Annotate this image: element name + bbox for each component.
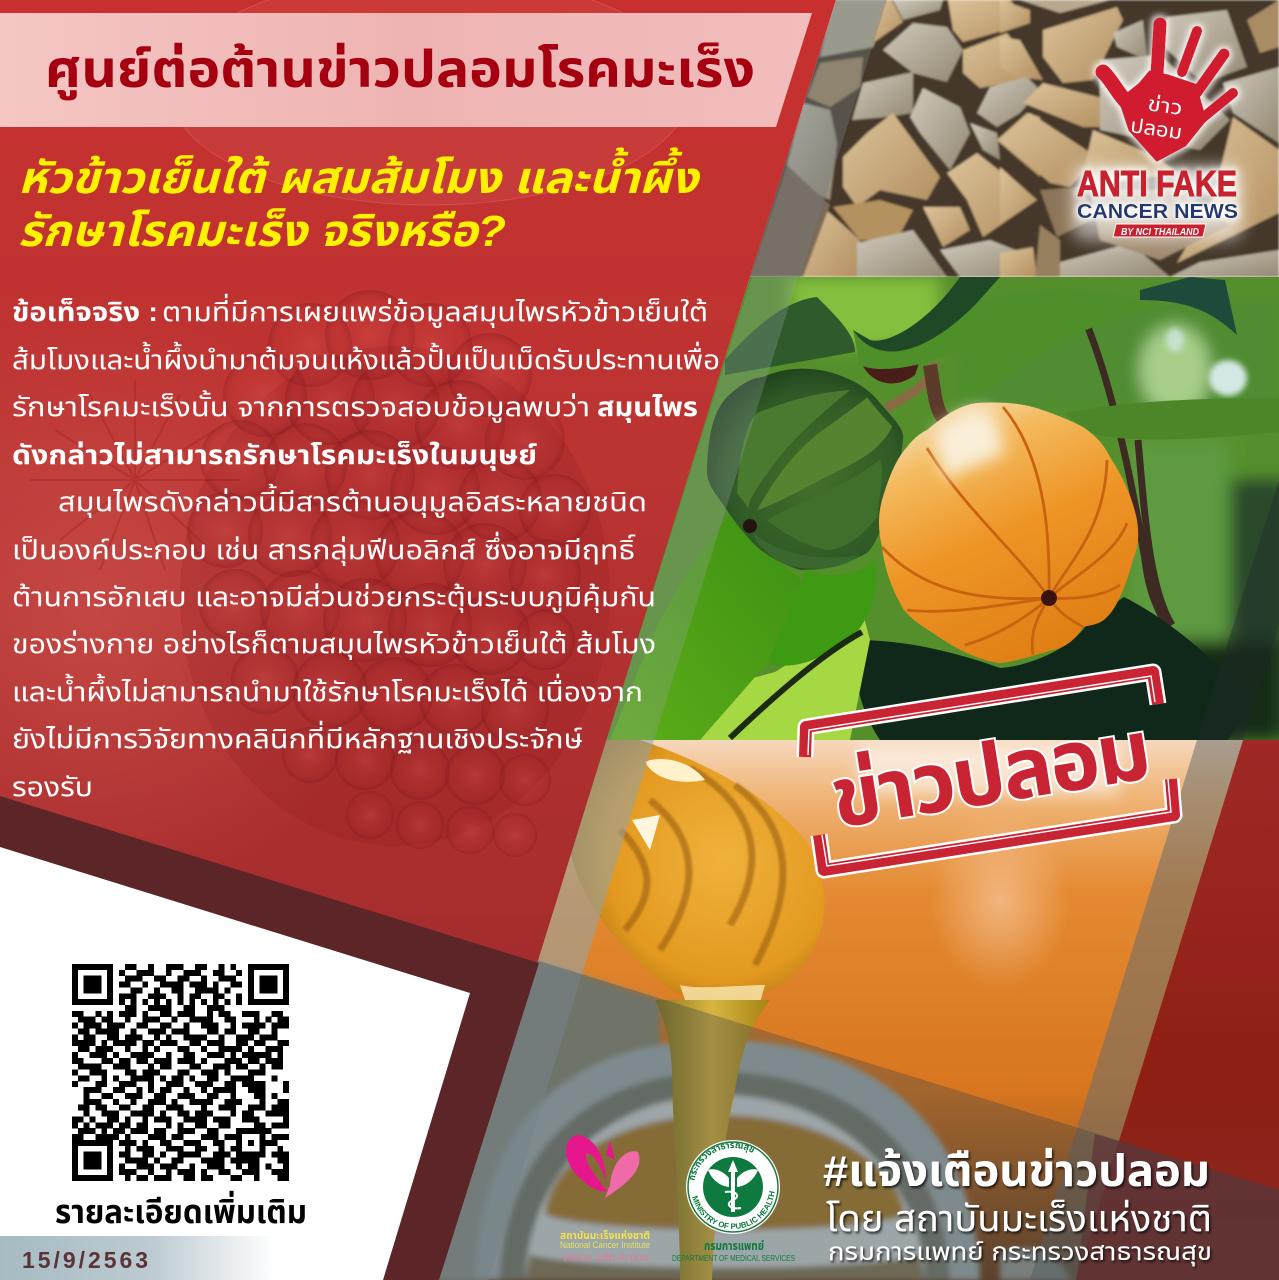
text: fake news in palm: ปลอม (1129, 115, 1184, 144)
body text: รักษาโรคมะเร็งนั้น จากการตรวจสอบข้อมูลพบว่า (12, 390, 590, 423)
body text (12, 293, 720, 802)
body text: ตามที่มีการเผยแพร่ข้อมูลสมุนไพรหัวข้าวเย็นใต้ (162, 293, 708, 328)
footer text: hashtag and organisation: #แจ้งเตือนข่าวปลอม (823, 1147, 1210, 1196)
logo: ministry of public health (672, 1140, 795, 1263)
logo: ministry of public health: DEPARTMENT OF MEDICAL SERVICES (672, 1254, 795, 1263)
stem: lower branch (730, 632, 862, 738)
body text: สมุนไพร (597, 392, 698, 423)
leaf: top dark (725, 297, 855, 375)
body text: และน้ำผึ้งไม่สามารถนำมาใช้รักษาโรคมะเร็งได้ เนื่องจาก (12, 673, 643, 707)
overlay: right band on fruit (1226, 480, 1279, 740)
panel: red background (0, 0, 836, 1280)
footer text: hashtag and organisation (823, 1147, 1212, 1267)
subheading question: รักษาโรคมะเร็ง จริงหรือ? (18, 207, 506, 256)
panel: white QR area (0, 847, 470, 1280)
body text: ยังไม่มีการวิจัยทางคลินิกที่มีหลักฐานเชิงประจักษ์ (12, 720, 583, 754)
title: ศูนย์ต่อต้านข่าวปลอมโรคมะเร็ง (45, 41, 755, 101)
overlay: bottom right maroon (1076, 1134, 1279, 1280)
leaf: lower dark (855, 597, 1250, 740)
logo: national cancer institute (560, 1135, 650, 1264)
honey dipper (571, 740, 824, 1020)
overlay: bottom dark wash (439, 960, 1279, 1280)
green fruit (707, 369, 903, 570)
text: fake news in palm (1129, 90, 1187, 144)
date band: 15/9/2563 (22, 1247, 148, 1273)
body text: ส้มโมงและน้ำผึ้งนำมาต้มจนแห้งแล้วปั้นเป็นเม็ดรับประทานเพื่อ (12, 341, 720, 375)
logo: national cancer institute: Vision with Action (562, 1252, 648, 1264)
logo: ministry of public health: กระทรวงสาธารณสุข (690, 1142, 754, 1180)
branch (1085, 320, 1172, 625)
overlay: right band on honey (1030, 740, 1243, 1280)
blurred foliage (790, 277, 1279, 740)
icon: caduceus (708, 1160, 758, 1212)
leaf: bottom left big (610, 512, 801, 740)
body text: ของร่างกาย อย่างไรก็ตามสมุนไพรหัวข้าวเย็นใต้ ส้มโมง (12, 629, 656, 660)
badge: by nci thailand: BY NCI THAILAND (1121, 227, 1199, 238)
body text: สมุนไพรดังกล่าวนี้มีสารต้านอนุมูลอิสระหลายชนิด (58, 483, 647, 518)
leaf: bottom lime gap (700, 610, 870, 740)
overlay: translucent band on stones (750, 0, 887, 277)
body text: รองรับ (12, 772, 93, 802)
photo: honey dipper and jar (439, 740, 1279, 1280)
text: cancer news: CANCER NEWS (1077, 201, 1238, 223)
body text: ดังกล่าวไม่สามารถรักษาโรคมะเร็งในมนุษย์ (12, 440, 537, 471)
panel: dark maroon corner (0, 796, 539, 1280)
icon: pink wings (566, 1135, 639, 1198)
date band (0, 1236, 275, 1280)
overlay: right red panel (1097, 740, 1279, 1226)
illustration: spiky cell (30, 380, 240, 570)
logo: national cancer institute: สถาบันมะเร็งแห่งชาติ (560, 1229, 650, 1242)
stamp: fake news: ข่าวปลอม (825, 702, 1157, 845)
photo: garcinia fruit (600, 277, 1279, 740)
body text: ต้านการอักเสบ และอาจมีส่วนช่วยกระตุ้นระบบภูมิคุ้มกัน (12, 582, 656, 613)
body text: เป็นองค์ประกอบ เช่น สารกลุ่มฟีนอลิกส์ ซึ่งอาจมีฤทธิ์ (12, 531, 636, 566)
subheading question: หัวข้าวเย็นใต้ ผสมส้มโมง และน้ำผึ้ง (18, 147, 701, 203)
body text: ข้อเท็จจริง : (12, 297, 158, 327)
photo: stones (740, 0, 1279, 277)
QR caption: รายละเอียดเพิ่มเติม (55, 1190, 307, 1230)
jar (440, 958, 1070, 1280)
text: fake news in palm: ข่าว (1146, 92, 1184, 120)
QR code (72, 964, 289, 1181)
glow: behind logo text (1072, 165, 1242, 240)
footer text: hashtag and organisation: กรมการแพทย์ กระทรวงสาธารณสุข (828, 1238, 1212, 1267)
logo: ministry of public health: กรมการแพทย์ (704, 1239, 764, 1253)
orange fruit (879, 402, 1138, 663)
subheading question (18, 147, 701, 256)
logo: ministry of public health: MINISTRY OF PUBLIC HEALTH (692, 1191, 775, 1229)
leaf: top large (853, 307, 1153, 398)
illustration: faint blood cell (170, 0, 690, 205)
overlay: translucent band on fruit (606, 277, 798, 740)
footer text: hashtag and organisation: โดย สถาบันมะเร็งแห่งชาติ (826, 1198, 1212, 1239)
illustration: cancer cell texture (180, 290, 610, 857)
leaf: right horizontal (1065, 398, 1279, 440)
icon: red hand (1103, 24, 1233, 160)
stamp: fake news (805, 672, 1174, 870)
honey stream (655, 1000, 770, 1280)
text: anti fake: ANTI FAKE (1077, 163, 1237, 204)
logo: national cancer institute: National Cancer Institute (560, 1240, 650, 1250)
logo: anti fake cancer news (1077, 24, 1238, 238)
heading banner (0, 13, 812, 127)
overlay: left band on honey (439, 740, 654, 1280)
